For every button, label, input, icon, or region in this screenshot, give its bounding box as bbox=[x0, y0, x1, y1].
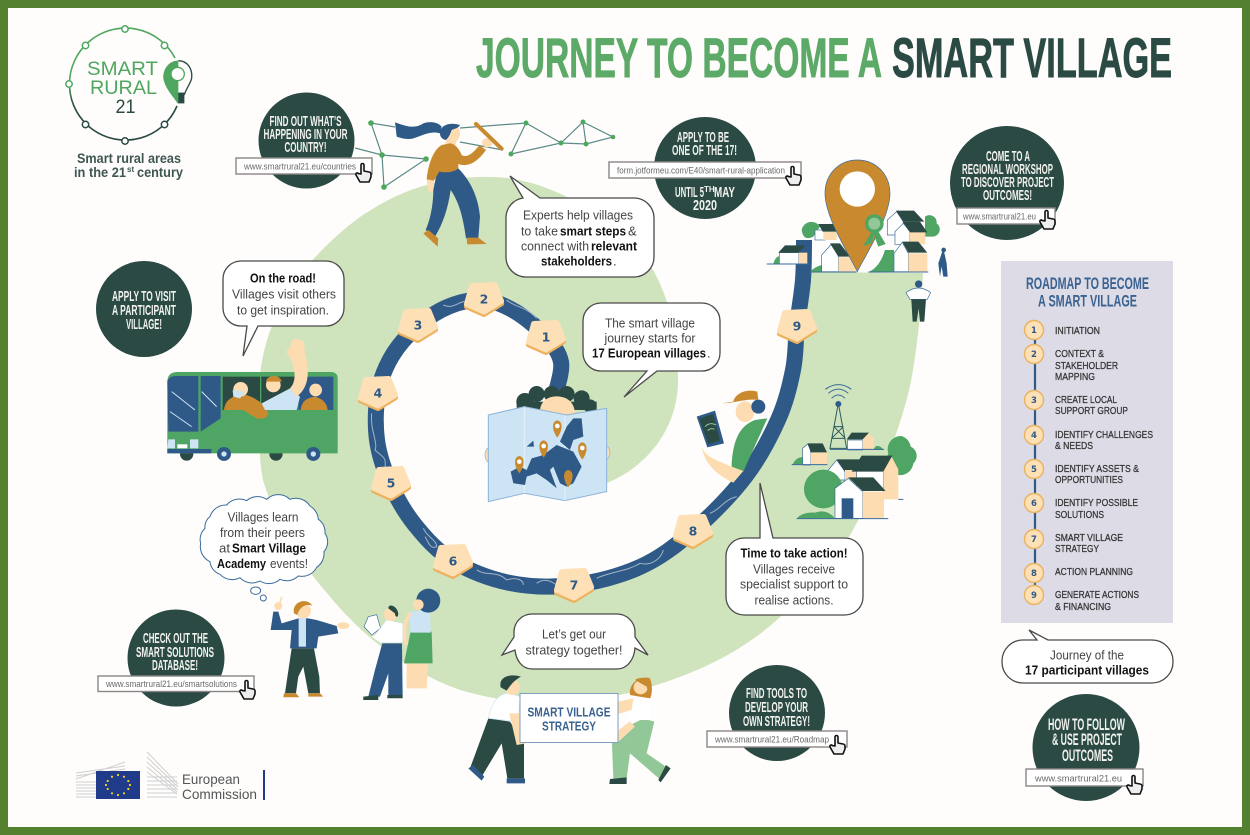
badge: apply to be one of the 17: APPLY TO BE bbox=[677, 129, 729, 146]
callout: thought cloud, Smart Village Academy: events! bbox=[270, 556, 308, 571]
roadmap timeline: 5 bbox=[1031, 465, 1037, 475]
roadmap steps: IDENTIFY CHALLENGES bbox=[1055, 429, 1153, 441]
station 6: 6 bbox=[449, 554, 458, 568]
spiral road with stations bbox=[361, 240, 814, 600]
station 6 bbox=[436, 547, 470, 576]
badge: smart solutions database: www.smartrural21.eu/smartsolutions bbox=[105, 679, 237, 690]
callout: time to take action: realise actions. bbox=[754, 592, 834, 608]
banner: smart village strategy: SMART VILLAGE bbox=[528, 706, 610, 720]
badge: how to follow: HOW TO FOLLOW bbox=[1048, 715, 1125, 734]
station 9 bbox=[780, 312, 814, 341]
callout: journey of the 17 participant villages bbox=[1002, 630, 1173, 683]
callout: journey of the 17 participant villages: 17 participant villages bbox=[1025, 662, 1149, 678]
station 3 bbox=[401, 311, 435, 340]
badge: apply to be one of the 17: form.jotformeu.com/E40/smart-rural-application bbox=[617, 166, 785, 176]
callout: on the road: to get inspiration. bbox=[237, 302, 329, 318]
roadmap steps: SUPPORT GROUP bbox=[1055, 405, 1128, 417]
callout: experts bbox=[506, 176, 654, 277]
roadmap heading: ROADMAP TO BECOME bbox=[1026, 274, 1149, 293]
station 9: 9 bbox=[793, 318, 801, 334]
station 7 bbox=[557, 571, 591, 600]
badge: smart solutions database: SMART SOLUTIONS bbox=[136, 644, 214, 661]
figure: woman drawing the network bbox=[395, 122, 502, 247]
illustration: destination village with location pin bbox=[767, 160, 948, 322]
roadmap steps bbox=[1055, 325, 1153, 613]
roadmap timeline: 9 bbox=[1031, 591, 1037, 601]
roadmap steps: MAPPING bbox=[1055, 371, 1095, 383]
roadmap steps: SOLUTIONS bbox=[1055, 509, 1104, 521]
figures: carrying strategy banner bbox=[468, 675, 671, 784]
roadmap timeline: 2 bbox=[1031, 350, 1037, 360]
roadmap steps: STAKEHOLDER bbox=[1055, 360, 1118, 372]
roadmap timeline: 3 bbox=[1031, 396, 1037, 406]
roadmap steps: ACTION PLANNING bbox=[1055, 566, 1133, 578]
logo: Smart Rural 21 bbox=[66, 26, 192, 180]
badge: smart solutions database bbox=[98, 610, 255, 706]
station 7: 7 bbox=[570, 578, 578, 592]
title: JOURNEY TO BECOME A bbox=[476, 26, 882, 89]
badge: find out what's happening bbox=[236, 92, 372, 188]
callout: time to take action bbox=[726, 483, 863, 615]
callout: on the road bbox=[223, 261, 344, 356]
roadmap timeline: 4 bbox=[1031, 431, 1037, 441]
badge: apply to be one of the 17: 2020 bbox=[693, 197, 717, 214]
badge: smart solutions database: DATABASE! bbox=[152, 657, 198, 674]
badge: smart solutions database: CHECK OUT THE bbox=[143, 630, 208, 647]
roadmap steps: & NEEDS bbox=[1055, 440, 1093, 452]
light green spiral background bbox=[259, 177, 923, 703]
figure: person holding Europe map bbox=[485, 386, 610, 502]
roadmap steps: SMART VILLAGE bbox=[1055, 532, 1123, 544]
banner: smart village strategy: STRATEGY bbox=[542, 720, 597, 734]
roadmap steps: CONTEXT & bbox=[1055, 348, 1104, 360]
roadmap steps: IDENTIFY POSSIBLE bbox=[1055, 497, 1138, 509]
network constellation bbox=[355, 120, 615, 190]
badge: apply to be one of the 17: TH bbox=[704, 185, 715, 194]
callout: time to take action: specialist support to bbox=[740, 576, 848, 592]
callout: strategy together bbox=[502, 614, 648, 669]
callout: experts: relevant bbox=[591, 238, 638, 254]
roadmap steps: STRATEGY bbox=[1055, 543, 1099, 555]
badge: regional workshop: COME TO A bbox=[986, 148, 1030, 165]
station 1 bbox=[529, 323, 563, 352]
badge: how to follow: OUTCOMES bbox=[1062, 746, 1113, 765]
callout: experts: Experts help villages bbox=[523, 208, 633, 222]
panel: roadmap bbox=[1001, 261, 1173, 623]
roadmap timeline bbox=[1024, 320, 1044, 604]
badge: how to follow: www.smartrural21.eu bbox=[1034, 774, 1122, 784]
roadmap timeline: 1 bbox=[1031, 326, 1037, 336]
logo: European Commission: European bbox=[182, 771, 240, 787]
badge: apply to be one of the 17: ONE OF THE 17! bbox=[672, 142, 737, 159]
badge: apply to visit: VILLAGE! bbox=[126, 316, 162, 333]
badge: apply to be one of the 17 bbox=[609, 117, 801, 219]
callout: experts: connect with bbox=[521, 238, 589, 254]
callout: experts: smart steps bbox=[560, 224, 626, 238]
callout: thought cloud, Smart Village Academy: Villages learn bbox=[228, 510, 298, 524]
callout: experts: & bbox=[628, 224, 637, 238]
callout: experts: . bbox=[613, 254, 617, 268]
badge: apply to be one of the 17: MAY bbox=[714, 184, 735, 201]
roadmap steps: GENERATE ACTIONS bbox=[1055, 589, 1139, 601]
callout: thought cloud, Smart Village Academy: at bbox=[219, 540, 230, 556]
badge: find tools: www.smartrural21.eu/Roadmap bbox=[714, 734, 829, 746]
roadmap steps: OPPORTUNITIES bbox=[1055, 474, 1123, 486]
callout: thought cloud, Smart Village Academy: from their peers bbox=[220, 525, 305, 540]
roadmap steps: IDENTIFY ASSETS & bbox=[1055, 463, 1139, 475]
callout: journey starts: . bbox=[707, 346, 711, 360]
station 2: 2 bbox=[480, 292, 488, 306]
roadmap steps: CREATE LOCAL bbox=[1055, 394, 1117, 406]
callout: time to take action: Villages receive bbox=[753, 562, 835, 576]
station 5 bbox=[374, 469, 408, 498]
banner: smart village strategy bbox=[520, 694, 618, 742]
badge: find out what's happening: www.smartrural21.eu/countries bbox=[243, 162, 356, 172]
roadmap steps: INITIATION bbox=[1055, 325, 1100, 337]
callout: journey starts: The smart village bbox=[605, 316, 695, 330]
station 5: 5 bbox=[387, 476, 395, 490]
roadmap timeline: 7 bbox=[1031, 535, 1037, 545]
badge: find tools: DEVELOP YOUR bbox=[745, 699, 808, 716]
badge: find out what's happening: FIND OUT WHAT’S bbox=[270, 113, 342, 130]
roadmap timeline: 6 bbox=[1031, 499, 1037, 509]
callout: thought cloud, Smart Village Academy: Academy bbox=[217, 556, 267, 571]
station 2 bbox=[467, 285, 501, 314]
badge: apply to visit: APPLY TO VISIT bbox=[112, 288, 176, 305]
station 1: 1 bbox=[542, 330, 550, 344]
logo: Smart Rural 21: Smart rural areas bbox=[77, 151, 181, 166]
callout: experts: to take bbox=[521, 224, 558, 238]
badge: find tools: OWN STRATEGY! bbox=[743, 713, 810, 730]
callout: thought cloud, Smart Village Academy: Smart Village bbox=[232, 540, 306, 556]
badge: how to follow bbox=[1026, 694, 1143, 801]
logo: Smart Rural 21: st bbox=[127, 165, 134, 174]
logo: Smart Rural 21: SMART bbox=[87, 58, 158, 80]
badge: apply to visit: A PARTICIPANT bbox=[112, 302, 176, 319]
callout: strategy together: strategy together! bbox=[526, 642, 622, 658]
badge: how to follow: & USE PROJECT bbox=[1052, 730, 1122, 749]
callout: experts: stakeholders bbox=[541, 254, 612, 268]
callout: time to take action: Time to take action! bbox=[740, 546, 848, 560]
badge: regional workshop: TO DISCOVER PROJECT bbox=[961, 174, 1054, 191]
callout: thought cloud, Smart Village Academy bbox=[200, 495, 328, 601]
illustration: village with antenna bbox=[792, 385, 917, 519]
station 8 bbox=[676, 517, 710, 546]
logo: Smart Rural 21: 21 bbox=[116, 97, 136, 118]
callout: on the road: Villages visit others bbox=[232, 286, 336, 302]
callout: on the road: On the road! bbox=[250, 270, 316, 286]
badge: find out what's happening: HAPPENING IN YOUR bbox=[264, 126, 348, 143]
badge: apply to visit bbox=[96, 261, 192, 357]
badge: find tools: FIND TOOLS TO bbox=[746, 685, 807, 702]
logo: European Commission: Commission bbox=[182, 786, 257, 802]
roadmap steps: & FINANCING bbox=[1055, 601, 1111, 613]
figures: peers at the academy bbox=[271, 589, 440, 700]
badge: find out what's happening: COUNTRY! bbox=[284, 139, 326, 156]
badge: find tools bbox=[707, 665, 847, 761]
callout: strategy together: Let’s get our bbox=[542, 626, 607, 642]
station 3: 3 bbox=[414, 318, 422, 332]
callout: journey of the 17 participant villages: Journey of the bbox=[1050, 648, 1124, 662]
figure: bus with villagers bbox=[167, 339, 338, 461]
roadmap heading bbox=[1026, 274, 1149, 310]
roadmap timeline: 8 bbox=[1031, 569, 1037, 579]
callout: journey starts bbox=[583, 303, 720, 397]
logo: European Commission bbox=[76, 752, 265, 802]
station 4: 4 bbox=[374, 386, 383, 400]
badge: apply to be one of the 17: UNTIL 5 bbox=[675, 184, 704, 201]
callout: journey starts: journey starts for bbox=[604, 330, 696, 346]
logo: Smart Rural 21: century bbox=[137, 165, 183, 180]
badge: regional workshop: www.smartrural21.eu bbox=[962, 212, 1036, 222]
figure: farmer with phone bbox=[697, 391, 767, 483]
callout: journey starts: 17 European villages bbox=[592, 346, 706, 360]
badge: regional workshop bbox=[950, 126, 1064, 240]
badge: regional workshop: REGIONAL WORKSHOP bbox=[962, 161, 1053, 178]
badge: regional workshop: OUTCOMES! bbox=[983, 187, 1032, 204]
station 8: 8 bbox=[689, 524, 697, 538]
roadmap heading: A SMART VILLAGE bbox=[1038, 292, 1137, 310]
logo: Smart Rural 21: in the 21 bbox=[74, 165, 126, 180]
logo: Smart Rural 21: RURAL bbox=[90, 77, 157, 99]
station 4 bbox=[361, 379, 395, 408]
